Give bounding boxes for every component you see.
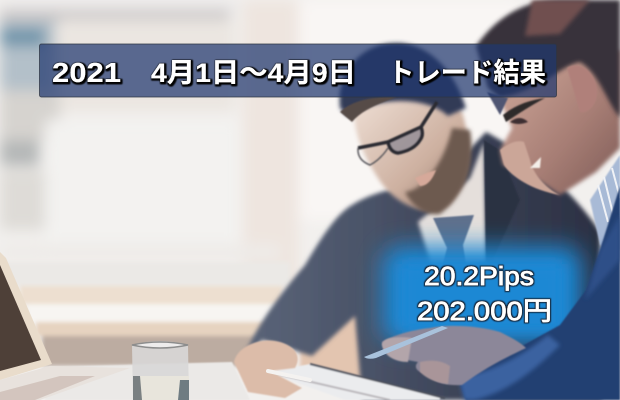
callout glow: blue highlight — [382, 246, 582, 344]
hair — [340, 43, 466, 116]
illustration: suit sleeve at right — [458, 186, 620, 400]
pips gained: 20.2Pips — [424, 261, 534, 291]
illustration: man with glasses in suit — [240, 43, 602, 400]
illustration: hand holding pen — [364, 326, 526, 385]
head — [354, 94, 468, 210]
illustration: water glass — [132, 341, 189, 400]
illustration: smiling man at right — [476, 0, 620, 250]
illustration: tablet on table — [267, 364, 445, 400]
title banner — [40, 44, 556, 97]
glasses — [358, 102, 437, 165]
result figures — [417, 261, 552, 326]
table surface — [45, 362, 250, 400]
title text — [52, 57, 546, 88]
title text: 4月1日～4月9日 — [151, 58, 356, 88]
title text: 2021 — [52, 57, 121, 88]
title text: トレード結果 — [388, 58, 546, 88]
illustration: left hand holding tablet — [234, 341, 310, 398]
striped shirt collar — [590, 155, 620, 250]
hair — [476, 0, 620, 118]
profit in yen: 202.000円 — [417, 296, 552, 326]
illustration: laptop — [0, 252, 130, 400]
tie — [433, 215, 474, 290]
